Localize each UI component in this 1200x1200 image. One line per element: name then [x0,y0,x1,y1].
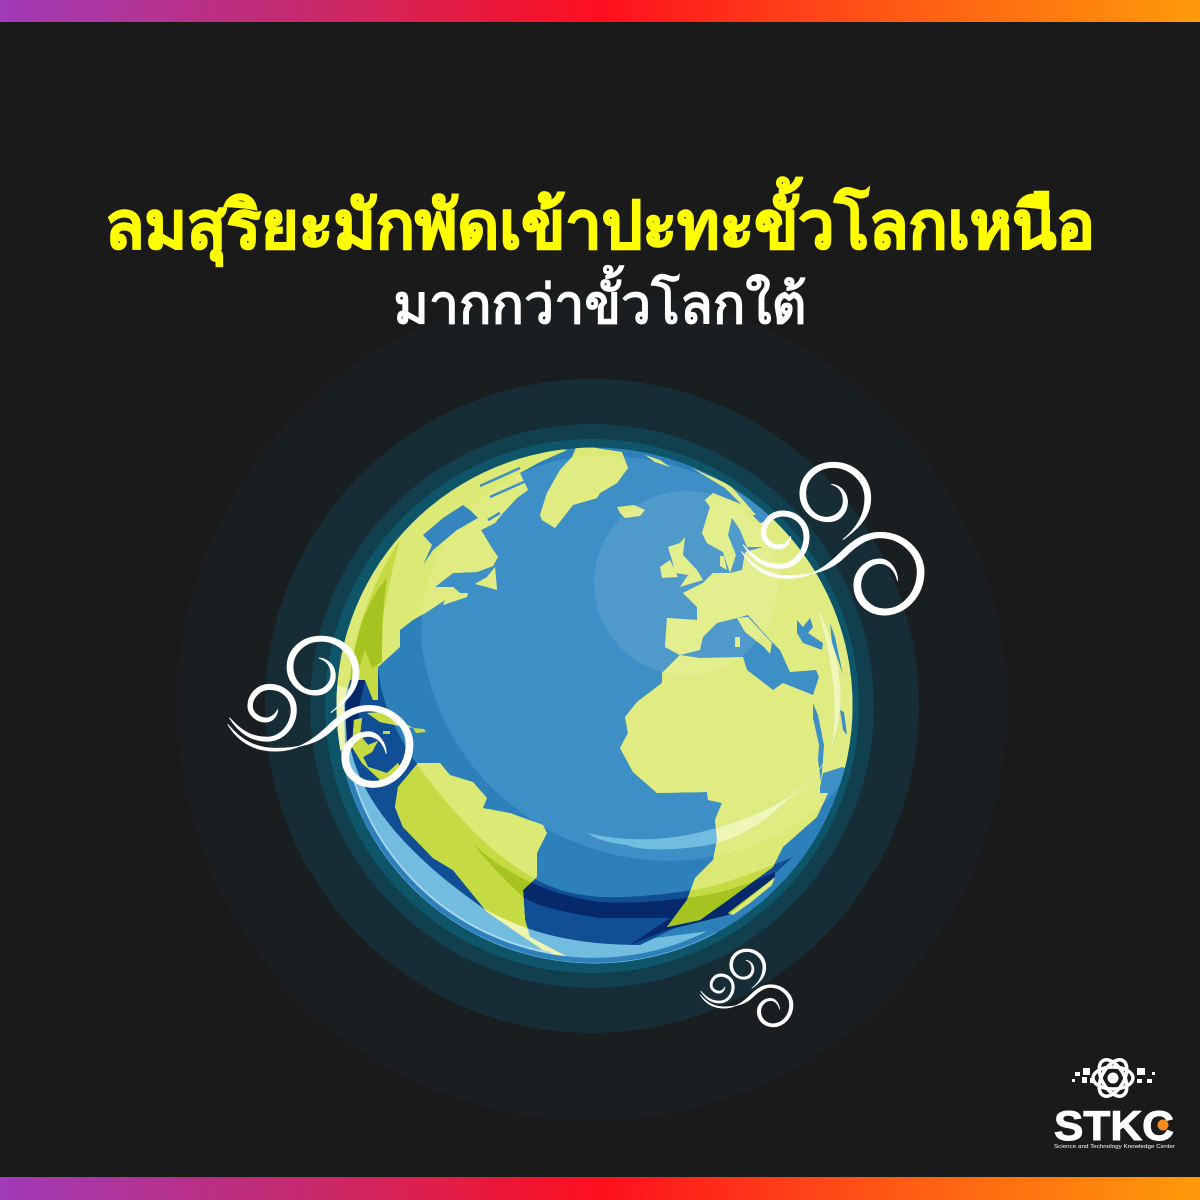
main ocean [421,456,870,861]
title line 1: ลมสุริยะมักพัดเข้าปะทะขั้วโลกเหนือ [105,176,1095,267]
wind swirl: upper right [742,462,924,615]
ocean rim [336,448,852,964]
land pale rim [336,685,566,956]
arctic channels [480,466,525,522]
bottom glass edge [351,771,551,953]
title line 2: มากกว่าขั้วโลกใต้ [394,265,806,335]
florida [358,650,373,700]
black sea [797,618,823,650]
continents [336,448,852,963]
baltic sea [728,518,763,573]
wind swirl: left [228,636,413,787]
persian gulf [840,710,847,735]
italy and sardinia [735,617,772,654]
top gradient bar [0,0,1200,22]
earth globe [336,448,852,964]
land rim tone [336,448,852,956]
reflection on land [716,608,841,844]
logo tagline: Science and Technology Knowledge Center [1054,1144,1175,1150]
highlight circle [594,491,778,675]
navy ocean band [523,872,775,945]
logo pixel squares [1072,1068,1155,1083]
reflection band [587,607,841,849]
hudson bay [423,505,478,565]
bottom gradient bar [0,1177,1200,1200]
mediterranean [680,615,819,695]
deep ocean crescent [348,667,793,945]
logo atom icon [1093,1055,1133,1101]
land dark tone south [474,844,775,927]
title [105,176,1095,335]
land main tone [421,456,870,861]
wind swirl: bottom small [700,949,793,1027]
STKC logo [1054,1055,1175,1150]
navy gulf band [345,680,365,757]
logo orange dot [1158,1120,1168,1130]
red sea [813,703,824,782]
land islands and denmark [617,455,756,587]
logo wordmark: STKC [1054,1102,1174,1149]
land shaded tone [348,540,793,945]
land dark tone north [350,577,387,683]
caspian sea [830,623,843,675]
atmosphere rings [177,291,1007,1121]
light blue lower crescent [336,686,716,964]
